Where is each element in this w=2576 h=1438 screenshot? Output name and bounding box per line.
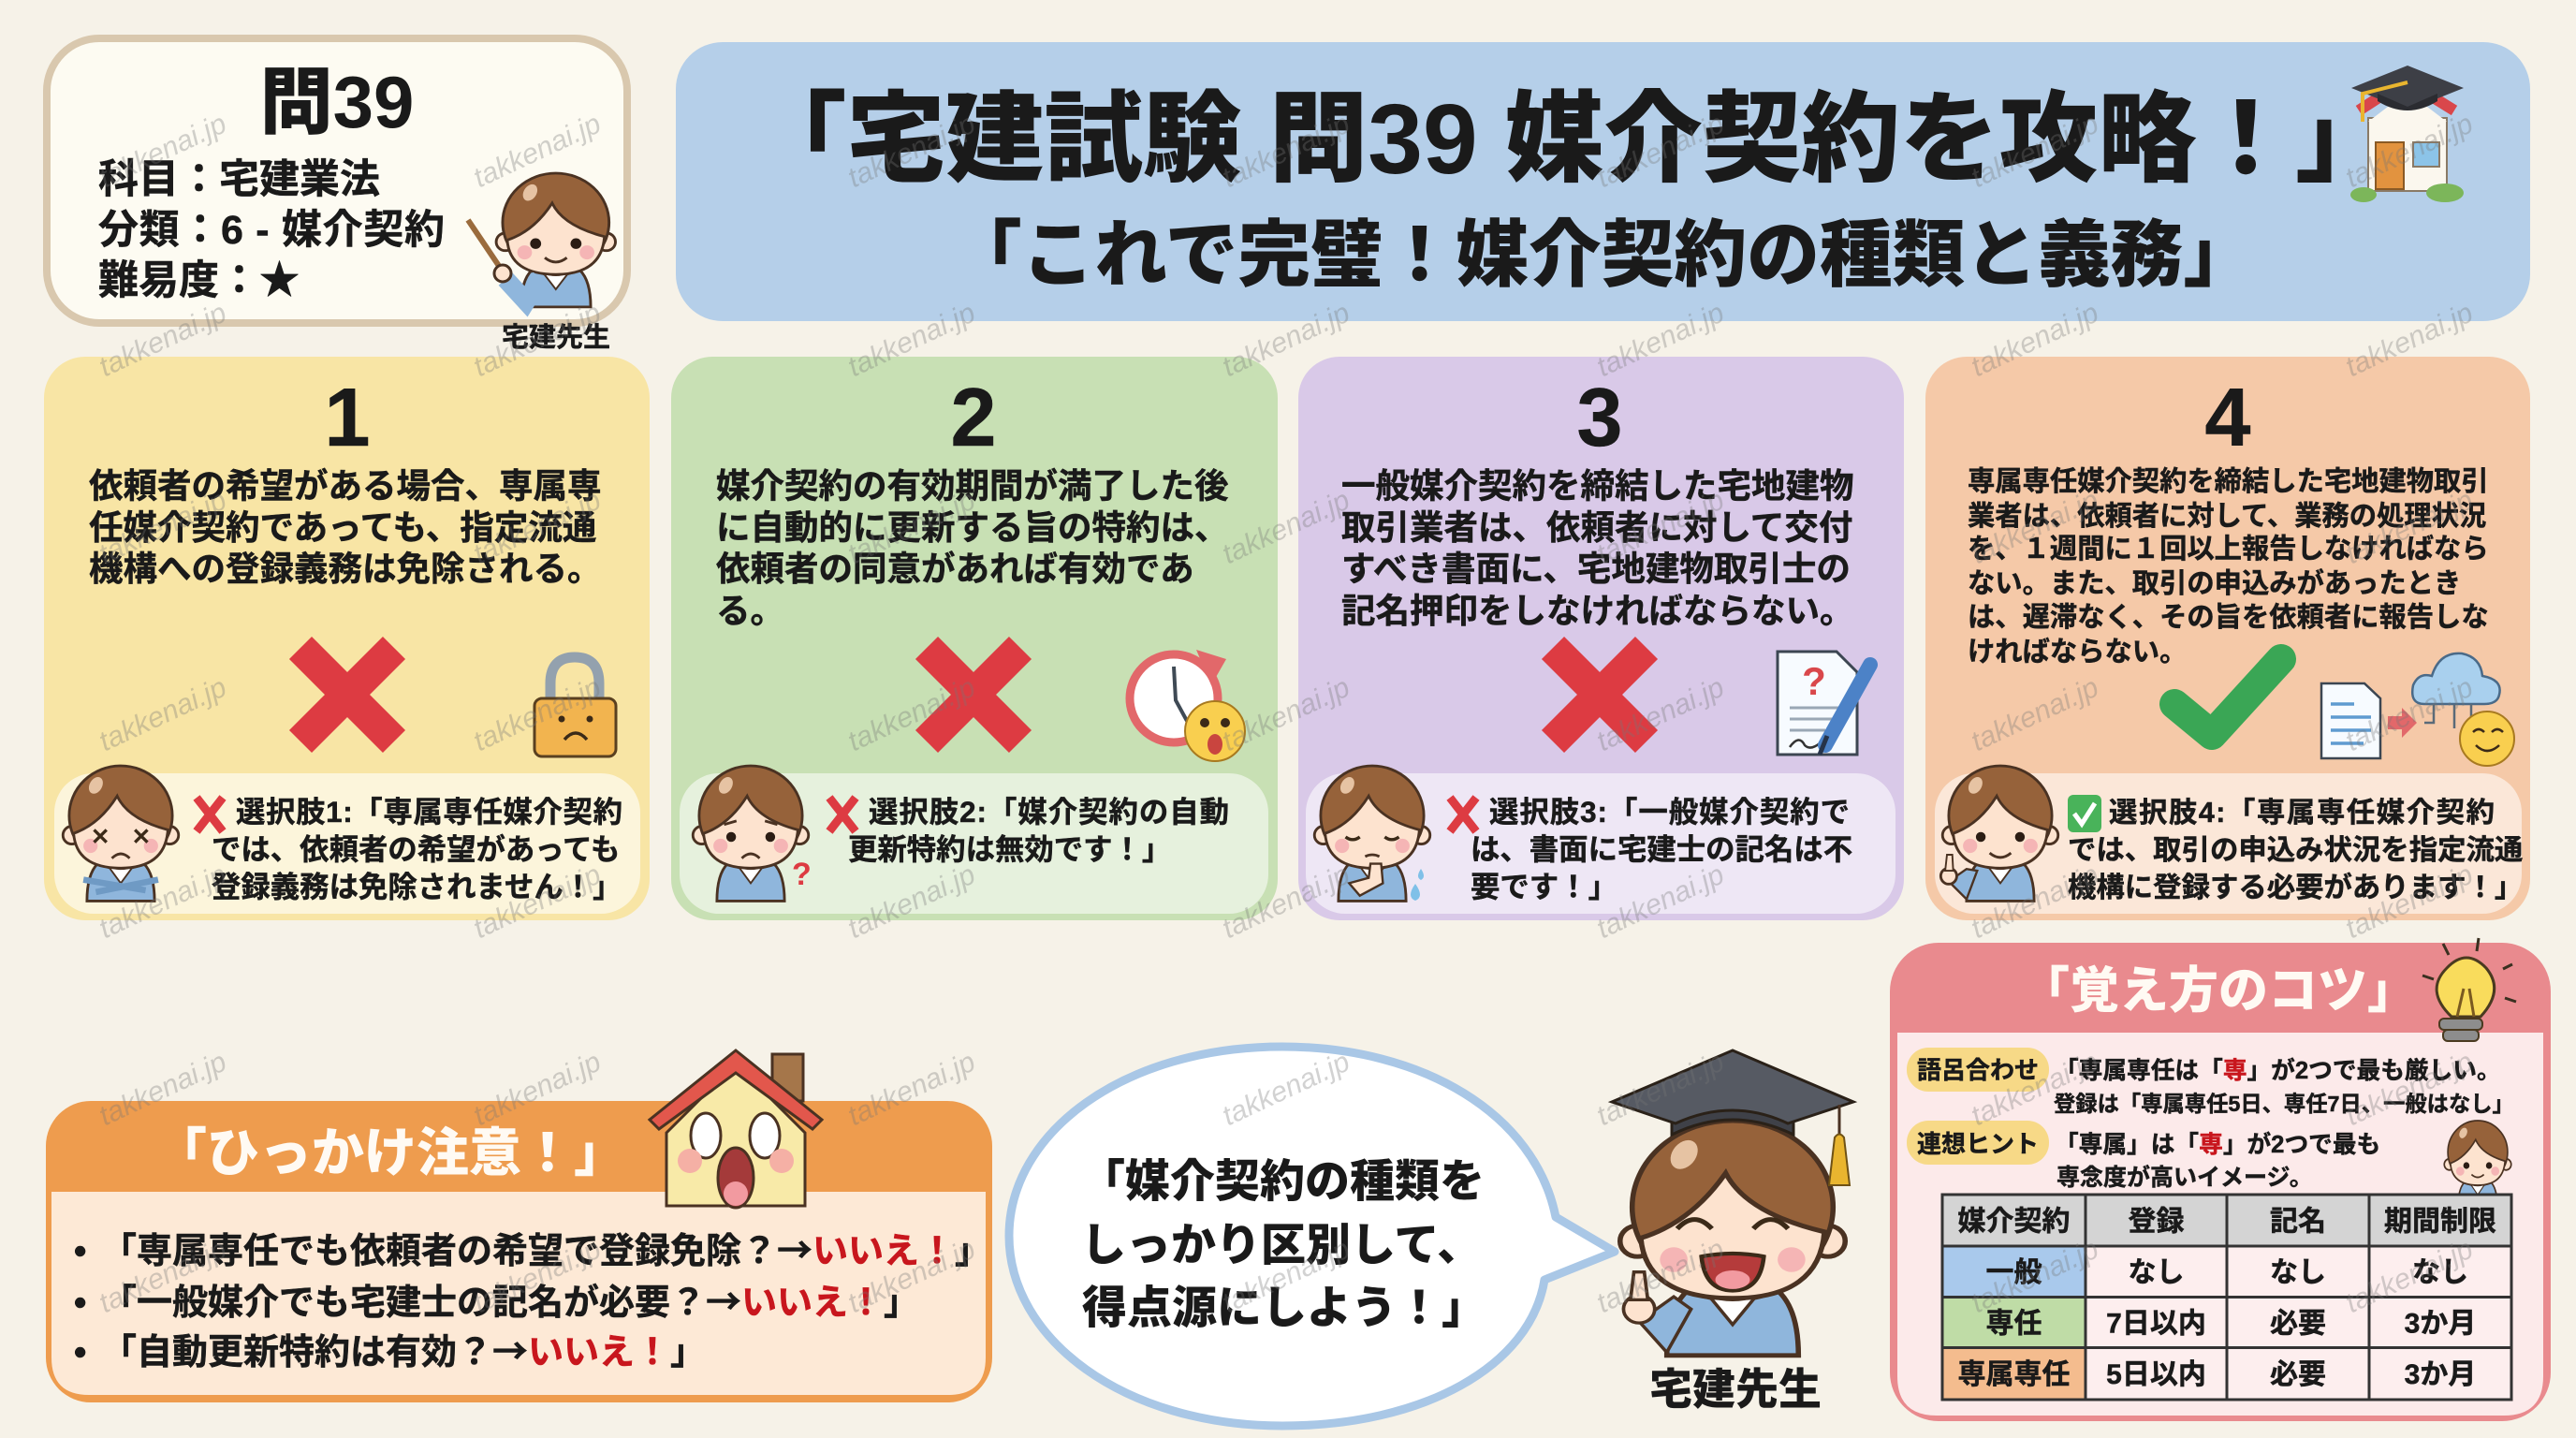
trap list: 「専属専任でも依頼者の希望で登録免除？→いいえ！」 <box>101 1222 990 1273</box>
text: takkenai.jp <box>1218 297 1354 383</box>
statement 1 <box>89 466 601 588</box>
speech bubble <box>1009 1047 1615 1426</box>
statement 2: 媒介契約の有効期間が満了した後 <box>716 466 1228 506</box>
character: dizzy, arms crossed <box>63 766 179 901</box>
text: takkenai.jp <box>843 671 980 757</box>
comparison table: 登録 <box>2129 1206 2185 1238</box>
statement 4 <box>1968 466 2489 668</box>
icon: document to cloud <box>2321 653 2514 766</box>
text: takkenai.jp <box>1218 858 1354 945</box>
text: takkenai.jp <box>469 484 606 570</box>
text: takkenai.jp <box>95 1046 231 1132</box>
text: takkenai.jp <box>2341 484 2478 570</box>
text: takkenai.jp <box>95 297 231 383</box>
callout text 1: 登録義務は免除されません！」 <box>212 871 622 903</box>
statement 4: 業者は、依頼者に対して、業務の処理状況 <box>1968 501 2486 532</box>
character: smiling, pointing <box>1940 766 2058 901</box>
text: takkenai.jp <box>843 1233 980 1319</box>
pill: mnemonic: 語呂合わせ <box>1917 1056 2039 1084</box>
statement 4: ない。また、取引の申込みがあったとき <box>1968 567 2461 599</box>
statement 4: は、遅滞なく、その旨を依頼者に報告しな <box>1968 602 2489 633</box>
comparison table: 専属専任 <box>1958 1359 2071 1390</box>
callout text 4: 選択肢4:「専属専任媒介契約 <box>2109 797 2495 829</box>
text: takkenai.jp <box>1592 484 1729 570</box>
icon: cap and house <box>2350 66 2464 202</box>
text: takkenai.jp <box>95 484 231 570</box>
comparison table: 必要 <box>2270 1309 2326 1339</box>
number 4: 4 <box>2205 371 2251 463</box>
text: takkenai.jp <box>469 1046 606 1132</box>
comparison table: なし <box>2412 1257 2468 1288</box>
panel: memory tips <box>1890 938 2551 1421</box>
panel: choice 2 <box>671 357 1278 920</box>
text: takkenai.jp <box>95 108 231 194</box>
callout text 1: 選択肢1:「専属専任媒介契約 <box>236 796 622 829</box>
text: takkenai.jp <box>1218 671 1354 757</box>
pill: mnemonic <box>1907 1048 2049 1092</box>
question number: 問39 <box>260 61 414 143</box>
text: takkenai.jp <box>843 1046 980 1132</box>
number 2: 2 <box>951 371 996 463</box>
text: takkenai.jp <box>1218 484 1354 570</box>
callout text 1: では、依頼者の希望があっても <box>212 832 620 866</box>
text: takkenai.jp <box>95 858 231 945</box>
comparison table: 期間制限 <box>2384 1206 2496 1238</box>
association text <box>2055 1130 2380 1191</box>
text: takkenai.jp <box>1218 1233 1354 1319</box>
statement 3: 取引業者は、依頼者に対して交付 <box>1341 508 1852 547</box>
text: takkenai.jp <box>1967 671 2103 757</box>
text: takkenai.jp <box>469 858 606 945</box>
callout text 3: 要です！」 <box>1471 871 1617 903</box>
callout text 2: 更新特約は無効です！」 <box>848 833 1171 866</box>
text: takkenai.jp <box>1967 858 2103 945</box>
statement 2: 依頼者の同意があれば有効であ <box>716 550 1194 588</box>
statement 2: に自動的に更新する旨の特約は、 <box>716 508 1228 547</box>
character: graduate teacher <box>1612 1050 1853 1414</box>
mark: wrong <box>1553 648 1647 741</box>
comparison table: 5日以内 <box>2106 1359 2206 1390</box>
teacher name: 宅建先生 <box>1649 1365 1822 1414</box>
text: takkenai.jp <box>469 108 606 194</box>
callout text 3: 選択肢3:「一般媒介契約で <box>1489 796 1850 829</box>
text: takkenai.jp <box>1967 484 2103 570</box>
callout 3 <box>1306 766 1895 914</box>
icon: light bulb <box>2422 938 2516 1041</box>
text: takkenai.jp <box>843 484 980 570</box>
icon: sweat drops <box>1411 869 1424 901</box>
text: takkenai.jp <box>1967 108 2103 194</box>
text: takkenai.jp <box>1592 671 1729 757</box>
text: takkenai.jp <box>1592 108 1729 194</box>
icon: document and pen <box>1778 652 1870 755</box>
panel: question info <box>47 38 627 323</box>
callout 1 <box>54 766 640 914</box>
icon: document and pen: ? <box>1802 659 1826 703</box>
text: takkenai.jp <box>2341 858 2478 945</box>
mark: wrong <box>300 648 394 741</box>
bubble text: 得点源にしよう！」 <box>1082 1284 1486 1333</box>
text: takkenai.jp <box>1967 1233 2103 1319</box>
comparison table: なし <box>2270 1257 2326 1288</box>
number 1: 1 <box>325 371 370 463</box>
number 3: 3 <box>1577 371 1622 463</box>
text: takkenai.jp <box>95 1233 231 1319</box>
text: takkenai.jp <box>2341 1233 2478 1319</box>
trap list <box>74 1222 990 1374</box>
comparison table: 専任 <box>1986 1309 2042 1339</box>
callout 4 <box>1935 766 2523 914</box>
comparison table: 3か月 <box>2405 1309 2476 1339</box>
callout text 3 <box>1471 796 1852 903</box>
trap list: 「一般媒介でも宅建士の記名が必要？→いいえ！」 <box>101 1273 919 1325</box>
text: takkenai.jp <box>1592 858 1729 945</box>
comparison table: 3か月 <box>2405 1359 2476 1390</box>
panel: trap warning <box>46 1050 992 1402</box>
comparison table: 媒介契約 <box>1958 1206 2071 1238</box>
pill: association hint <box>1907 1121 2049 1165</box>
text: takkenai.jp <box>469 671 606 757</box>
callout text 1 <box>212 796 622 903</box>
character: small teacher <box>2444 1121 2511 1206</box>
comparison table: 一般 <box>1986 1257 2042 1288</box>
callout text 4 <box>2068 797 2523 903</box>
statement 2: る。 <box>716 592 784 630</box>
text: takkenai.jp <box>1218 108 1354 194</box>
pill: association hint: 連想ヒント <box>1917 1130 2039 1158</box>
text: takkenai.jp <box>469 1233 606 1319</box>
text: takkenai.jp <box>1592 1233 1729 1319</box>
mark: small cross <box>829 798 856 831</box>
comparison table: 記名 <box>2270 1206 2326 1238</box>
trap list: • <box>74 1333 86 1372</box>
association text: 「専属」は「専」が2つで最も <box>2055 1130 2380 1158</box>
bubble text <box>1080 1157 1486 1333</box>
statement 4: ければならない。 <box>1968 637 2187 668</box>
text: takkenai.jp <box>1592 1046 1729 1132</box>
comparison table <box>1942 1195 2511 1400</box>
mark: correct <box>2174 659 2281 735</box>
statement 2 <box>716 466 1228 630</box>
association text: 専念度が高いイメージ。 <box>2056 1164 2313 1191</box>
callout text 2: 選択肢2:「媒介契約の自動 <box>869 796 1229 829</box>
mark: green check <box>2068 795 2101 832</box>
text: takkenai.jp <box>2341 108 2478 194</box>
text: takkenai.jp <box>1218 1046 1354 1132</box>
text: takkenai.jp <box>843 297 980 383</box>
statement 1: 依頼者の希望がある場合、専属専 <box>89 466 601 506</box>
text: takkenai.jp <box>469 297 606 383</box>
text: takkenai.jp <box>95 671 231 757</box>
comparison table: 7日以内 <box>2106 1309 2206 1339</box>
character: thinking <box>1314 766 1430 901</box>
panel: choice 3 <box>1298 357 1904 920</box>
trap list: • <box>74 1284 86 1323</box>
mnemonic text: 「専属専任は「専」が2つで最も厳しい。 <box>2055 1056 2501 1084</box>
trap list: 「自動更新特約は有効？→いいえ！」 <box>101 1323 706 1374</box>
statement 1: 任媒介契約であっても、指定流通 <box>89 508 596 547</box>
trap list: • <box>74 1232 86 1271</box>
bubble text: しっかり区別して、 <box>1081 1221 1482 1270</box>
text: takkenai.jp <box>1967 297 2103 383</box>
text: takkenai.jp <box>2341 1046 2478 1132</box>
text: takkenai.jp <box>2341 671 2478 757</box>
callout text 4: では、取引の申込み状況を指定流通 <box>2068 834 2523 866</box>
mark: wrong <box>927 648 1020 741</box>
statement 4: 専属専任媒介契約を締結した宅地建物取引 <box>1968 466 2489 497</box>
statement 3 <box>1341 466 1853 630</box>
statement 1: 機構への登録義務は免除される。 <box>89 550 601 588</box>
mark: small question: ? <box>792 857 812 892</box>
text: takkenai.jp <box>843 858 980 945</box>
panel: choice 4 <box>1925 357 2530 920</box>
mark: small cross <box>1450 798 1476 831</box>
question meta <box>98 157 445 303</box>
statement 3: すべき書面に、宅地建物取引士の <box>1341 550 1851 588</box>
mark: small cross <box>197 798 223 831</box>
statement 4: を、１週間に１回以上報告しなければなら <box>1968 534 2489 565</box>
question meta: 科目：宅建業法 <box>98 157 380 202</box>
comparison table: 必要 <box>2270 1359 2326 1390</box>
callout 2 <box>680 766 1268 914</box>
question meta: 分類：6 - 媒介契約 <box>98 208 445 253</box>
callout text 3: は、書面に宅建士の記名は不 <box>1471 833 1852 866</box>
icon: clock and surprised face <box>1130 650 1245 761</box>
statement 3: 一般媒介契約を締結した宅地建物 <box>1341 466 1853 506</box>
text: takkenai.jp <box>1967 1046 2103 1132</box>
icon: scared house <box>650 1050 822 1208</box>
icon: sad lock <box>534 657 616 756</box>
icon: mortarboard <box>1612 1050 1853 1185</box>
statement 3: 記名押印をしなければならない。 <box>1341 592 1853 630</box>
character: teacher with pointer <box>468 173 616 353</box>
tips heading: 「覚え方のコツ」 <box>2020 963 2417 1019</box>
callout text 4: 機構に登録する必要があります！」 <box>2068 871 2523 903</box>
title: 「宅建試験 問39 媒介契約を攻略！」 <box>748 84 2393 195</box>
callout text 2 <box>848 796 1229 866</box>
trap heading: 「ひっかけ注意！」 <box>154 1123 626 1182</box>
panel: title banner <box>676 42 2530 321</box>
question meta: 難易度：★ <box>98 258 300 303</box>
teacher name: 宅建先生 <box>502 322 610 353</box>
mnemonic text <box>2054 1056 2514 1116</box>
text: takkenai.jp <box>2341 297 2478 383</box>
bubble text: 「媒介契約の種類を <box>1080 1157 1485 1207</box>
panel: choice 1 <box>44 357 650 920</box>
character: confused <box>693 766 809 901</box>
comparison table: なし <box>2129 1257 2185 1288</box>
text: takkenai.jp <box>1592 297 1729 383</box>
subtitle: 「これで完璧！媒介契約の種類と義務」 <box>949 215 2256 296</box>
mnemonic text: 登録は「専属専任5日、専任7日、一般はなし」 <box>2054 1092 2514 1116</box>
text: takkenai.jp <box>843 108 980 194</box>
